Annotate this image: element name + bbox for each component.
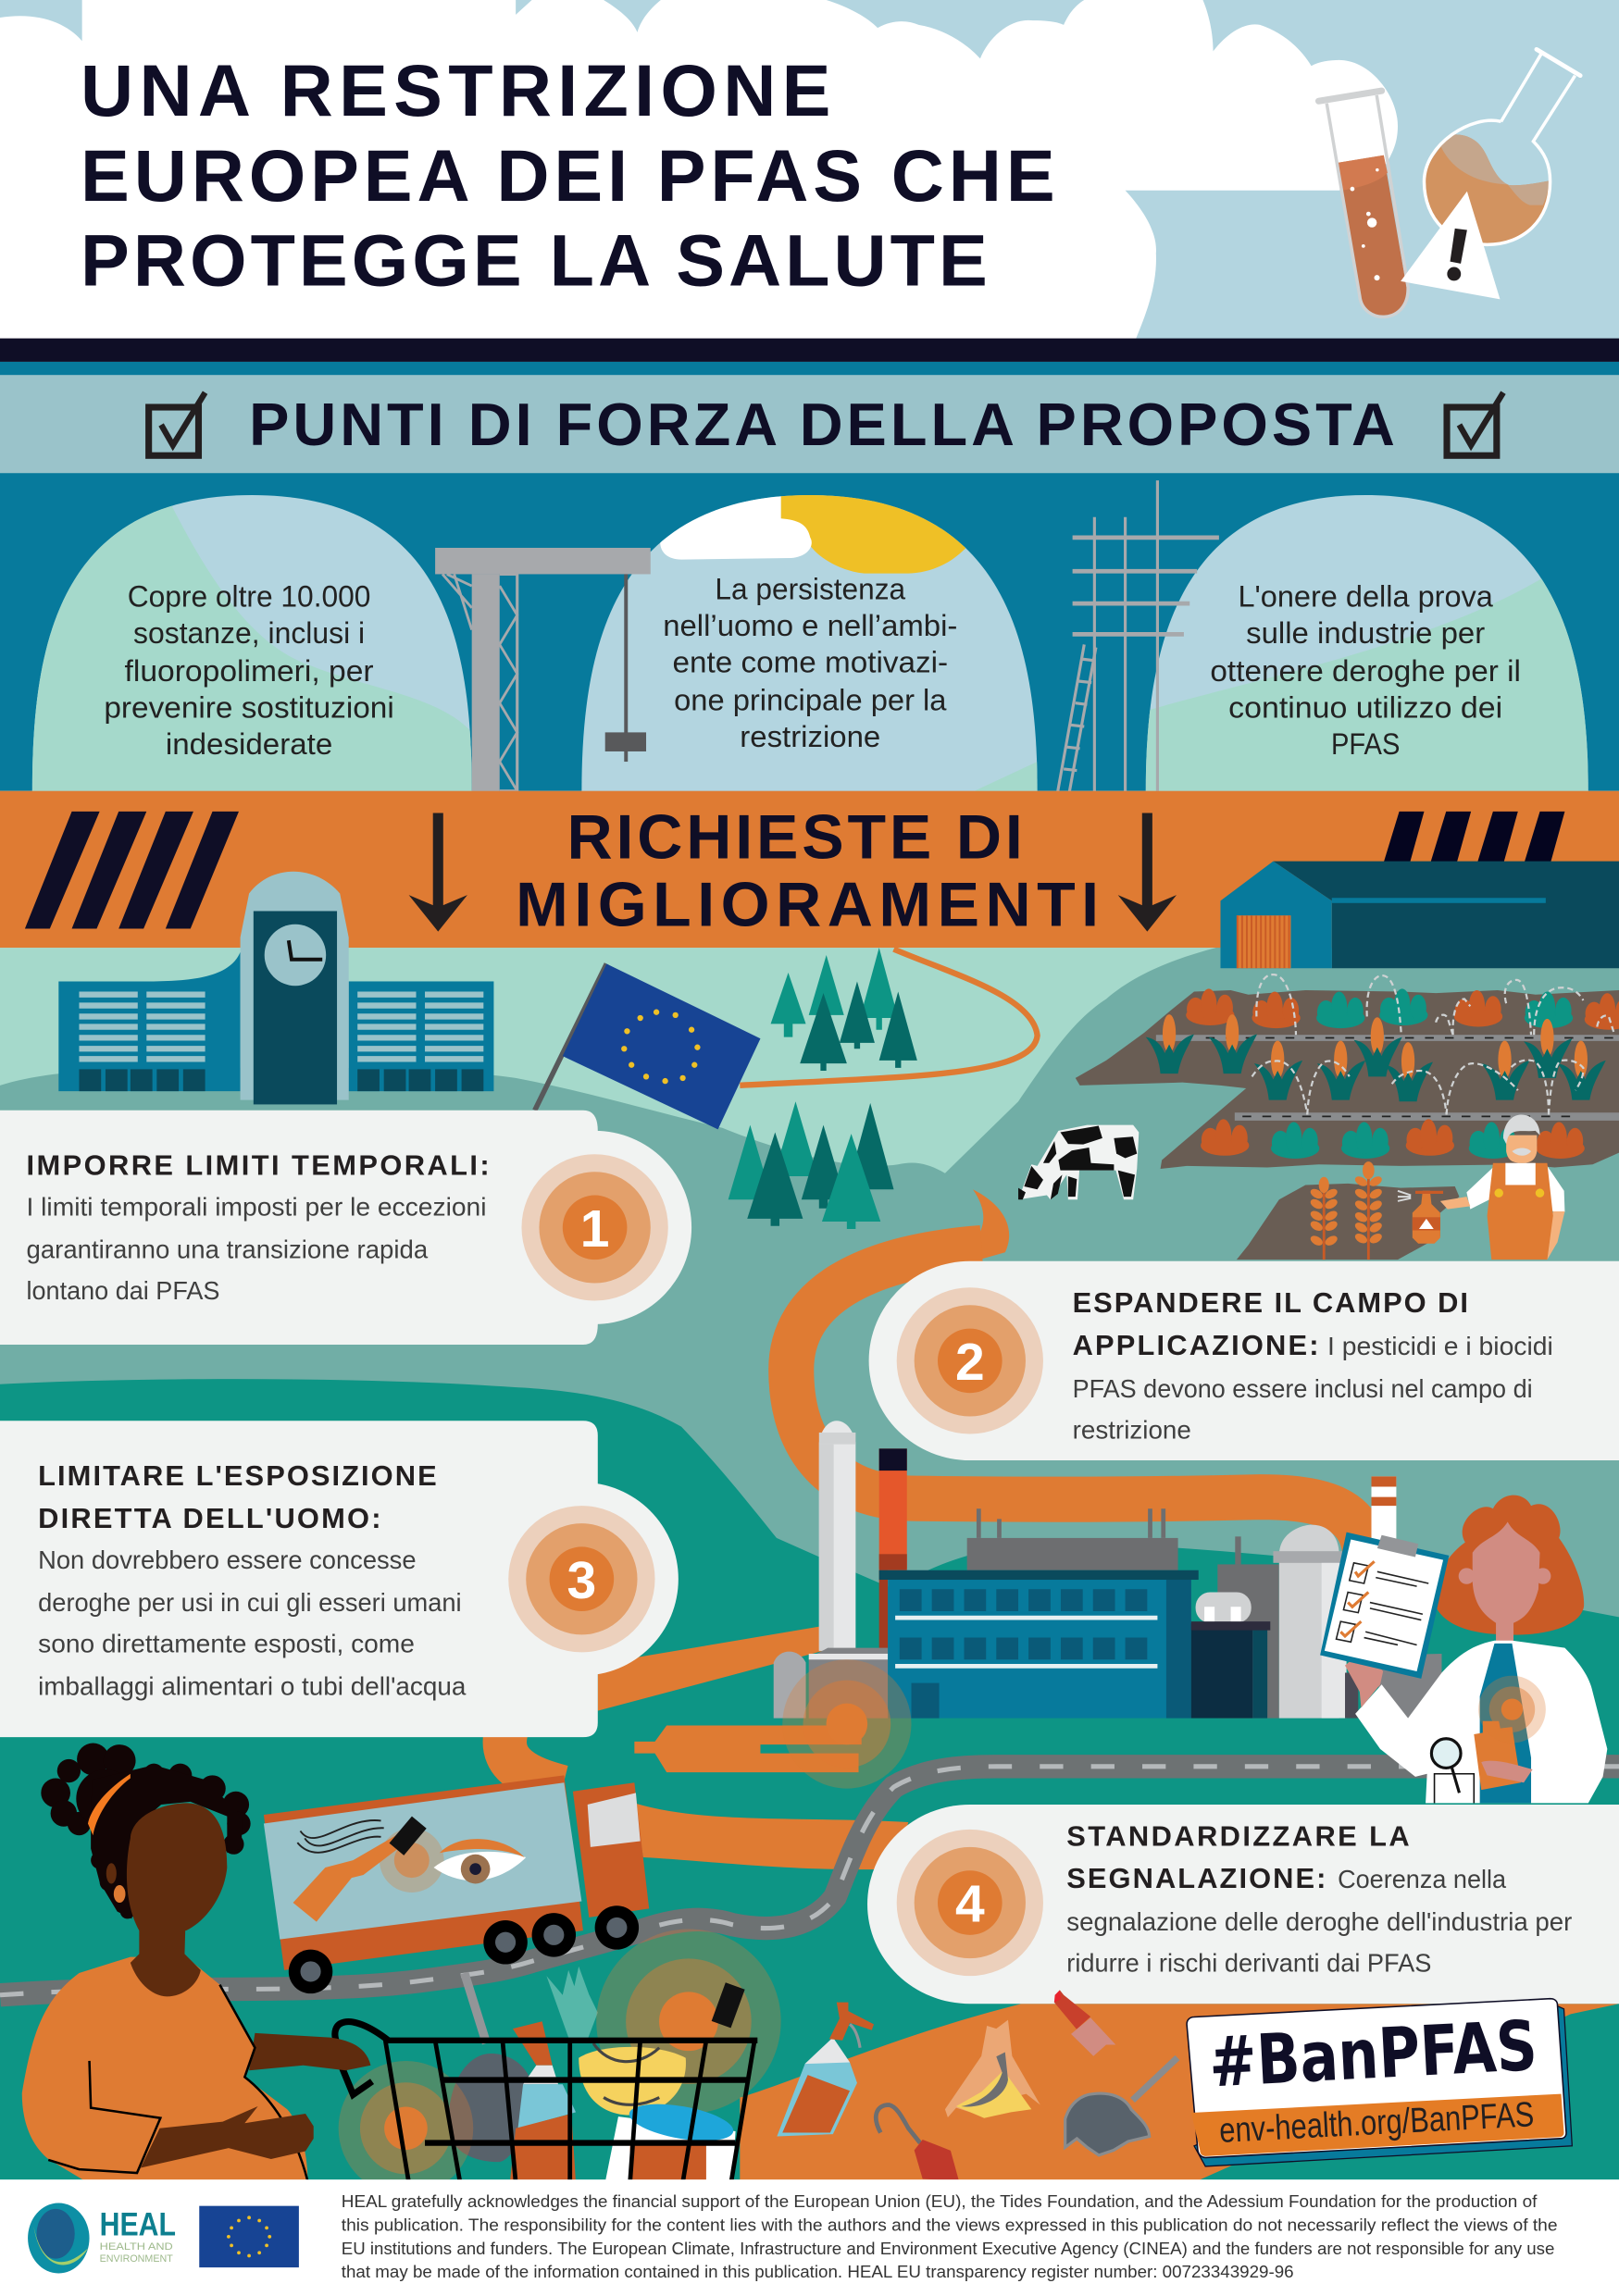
stripes left [25,812,239,928]
text: arch 3: L'onere della prova [1238,579,1494,613]
factory [774,1421,1441,1719]
text: card 1 body: garantiranno una transizione rapida [26,1235,429,1264]
shopping cart items [339,1973,736,2196]
text: card 1 heading: IMPORRE LIMITI TEMPORALI: [26,1148,490,1181]
truck [264,1775,649,1993]
stripes right [1383,812,1564,864]
text: arch 3: sulle industrie per [1246,616,1485,650]
panel: footer [0,2179,1619,2296]
heading: richieste di miglioramenti [516,802,1099,939]
icon: number 1 [521,1154,668,1301]
icon: magnifier and pocket [1431,1739,1474,1803]
orange thin road [740,949,1038,1086]
text: card 1 body: lontano dai PFAS [26,1276,219,1305]
icon: number 3 [508,1506,655,1652]
panel: card 4 [867,1805,1619,2004]
icon: frying pan [1065,2057,1177,2155]
icon: lipstick [1054,1990,1115,2056]
text: card 2: I pesticidi e i biocidi [1327,1332,1553,1360]
title: PROTEGGE LA SALUTE [81,219,988,302]
text: website: env-health.org/BanPFAS [1218,2095,1535,2151]
arrow left [409,813,467,932]
logo: HEAL [28,2203,176,2273]
text: card 2: APPLICAZIONE: [1073,1329,1319,1361]
hair [41,1744,251,1918]
icon: checkbox right [1447,392,1503,455]
panel: strengths section background [0,362,1619,791]
road [0,1767,1619,1995]
logo: HEAL: ENVIRONMENT [100,2253,173,2265]
dark divider band [0,339,1619,362]
white cloud behind title [0,0,1398,340]
icon: banana peel [945,2020,1040,2118]
icon: cart [335,2022,757,2182]
text: arch 1 [104,579,394,761]
text: card 4 [1066,1819,1572,1977]
icon: round flask [1424,49,1580,244]
text: card 2 [1073,1286,1553,1444]
text: acknowledgement: EU institutions and funders. The European Climate, Infrastructure and Environment Executive Agency (CINEA) and the funders are not responsible for any use [342,2240,1554,2258]
icon: test tube [1319,91,1408,316]
text: card 3 body: imballaggi alimentari o tubi dell'acqua [38,1671,467,1700]
text: card 4: segnalazione delle deroghe dell'industria per [1066,1907,1572,1936]
arrow right [1118,813,1177,932]
text: card 1 body [26,1193,486,1305]
text: arch 3: ottenere deroghe per il [1210,654,1521,688]
logo: EU flag [199,2206,299,2267]
wheels [289,1905,639,1993]
icon: number 4: 4 [955,1875,985,1934]
panel: requests band [0,791,1619,948]
crane [435,548,651,791]
text: arch 3: PFAS [1331,727,1400,761]
icon: EU flag [535,963,760,1129]
text: arch 2: nell’uomo e nell’ambi- [663,609,957,642]
text: arch 1: Copre oltre 10.000 [128,579,370,613]
panel: card 3 [0,1421,679,1737]
text: arch 1: prevenire sostituzioni [104,691,394,725]
pulse and glove behind cart [546,1930,781,2114]
text: arch 3: continuo utilizzo dei [1228,691,1502,725]
panel: card 1 [0,1111,691,1345]
truck ad: mascara and eye [293,1817,526,1922]
text: hashtag: #BanPFAS [1207,2005,1539,2103]
icon: number 4 [897,1830,1043,1976]
field [1076,974,1619,1260]
text: card 3 body: Non dovrebbero essere concesse [38,1545,417,1574]
text: card 2: restrizione [1073,1415,1191,1444]
logo: HEAL: HEALTH AND [100,2241,173,2253]
text: card 3 heading: LIMITARE L'ESPOSIZIONE [38,1459,437,1492]
orange plug shape [634,1726,862,1772]
orange river [504,1189,1365,1869]
text: acknowledgement [342,2192,1558,2281]
panel: strengths heading band [0,375,1619,473]
panel: arch 1 [31,495,472,790]
text: card 4: Coerenza nella [1338,1865,1507,1893]
text: card 2: ESPANDERE IL CAMPO DI [1073,1286,1468,1319]
icon: clipboard [1320,1533,1449,1679]
text: card 4: SEGNALAZIONE: [1066,1862,1326,1894]
sprinkler arcs [1252,974,1614,1114]
title [81,49,1055,302]
heading: richieste di miglioramenti: RICHIESTE DI [567,802,1023,873]
trees upper cluster [771,948,917,1071]
icon: cosmetic bottle [1474,1721,1521,1790]
text: arch 2: ente come motivazi- [673,645,948,678]
icon: number 1: 1 [580,1199,609,1259]
text: card 1 body: I limiti temporali imposti per le eccezioni [26,1193,486,1222]
text: arch 1: fluoropolimeri, per [125,654,374,688]
panel: sky header background [0,0,1619,340]
text: card 3 heading [38,1459,437,1534]
panel: arch 3 [1143,495,1619,791]
icon: EU building [58,872,493,1104]
text: acknowledgement: this publication. The responsibility for the content lies with the authors and the views expressed in this publication do not necessarily reflect the views of the [342,2216,1558,2235]
logo: HEAL: HEAL [100,2206,176,2242]
icon: number 3: 3 [567,1551,596,1610]
text: card 3 body: deroghe per usi in cui gli esseri umani [38,1588,462,1617]
text: arch 2 [663,572,957,753]
text: card 3 body [38,1545,467,1700]
icon: spray bottle [777,2003,874,2136]
text: acknowledgement: HEAL gratefully acknowledges the financial support of the European Union (EU), the Tides Foundation, and the Adessium Foundation for the production of [342,2192,1538,2211]
text: arch 3 [1210,579,1521,761]
cow [1018,1125,1139,1199]
icon: warning triangle [1401,192,1500,299]
icon: number 2: 2 [955,1333,985,1392]
heading: punti di forza: PUNTI DI FORZA DELLA PROPOSTA [249,391,1395,458]
icon: number 2 [897,1287,1043,1434]
text: arch 1: indesiderate [166,727,332,761]
heading: richieste di miglioramenti: MIGLIORAMENTI [516,869,1099,939]
sign: BanPFAS [1187,1999,1572,2166]
title: UNA RESTRIZIONE [81,49,830,131]
text: card 4: ridurre i rischi derivanti dai PFAS [1066,1948,1431,1977]
title: EUROPEA DEI PFAS CHE [81,134,1055,217]
text: card 4: STANDARDIZZARE LA [1066,1819,1410,1852]
text: arch 1: sostanze, inclusi i [133,616,365,650]
farmer [1309,1114,1564,1260]
text: card 2: PFAS devono essere inclusi nel campo di [1073,1374,1533,1403]
text: arch 2: one principale per la [674,684,947,717]
pulse rings at factory [782,1659,912,1789]
orange ground [740,2004,1619,2181]
scientist [1320,1496,1607,1803]
text: card 3 heading: DIRETTA DELL'UOMO: [38,1502,381,1534]
panel: card 2 [869,1261,1619,1460]
icon: pesticide bottle [1398,1191,1443,1244]
trees lower cluster [729,1101,894,1229]
text: arch 2: La persistenza [715,572,906,605]
icon: wheat [1309,1161,1384,1260]
scaffold and ladder [1058,480,1219,791]
text: arch 2: restrizione [740,720,880,753]
icon: umbrella [876,2104,959,2181]
landscape hills [0,948,1619,2181]
icon: checkbox left [149,392,205,455]
icon: barn [1220,862,1619,968]
pregnant woman [22,1744,370,2181]
text: card 3 body: sono direttamente esposti, come [38,1629,415,1657]
panel: lower landscape background [0,948,1619,2181]
panel: arch 2 [581,483,1055,791]
text: acknowledgement: that may be made of the information contained in this publication. HEAL EU transparency register number: 00723343929-96 [342,2263,1294,2281]
